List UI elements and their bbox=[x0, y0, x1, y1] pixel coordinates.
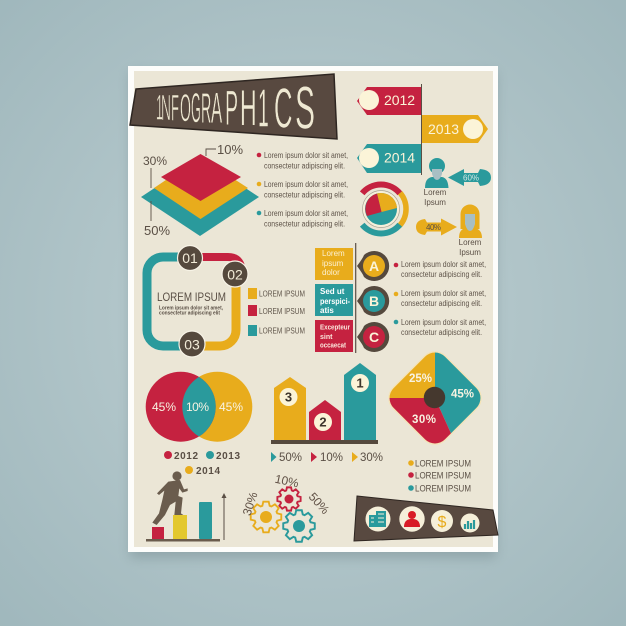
stacked layers chart bbox=[141, 142, 259, 238]
option B box: perspici- bbox=[320, 297, 350, 306]
gears: 30% bbox=[240, 490, 261, 517]
ABC options bbox=[315, 243, 389, 353]
timeline ribbons: 2013 bbox=[428, 121, 459, 137]
diamond pie chart: 30% bbox=[412, 414, 436, 426]
title text: C bbox=[274, 77, 293, 140]
option A box: Lorem bbox=[322, 249, 345, 258]
venn diagram bbox=[146, 372, 252, 442]
option C box: occaecat bbox=[320, 342, 347, 350]
title banner bbox=[130, 74, 337, 142]
diamond legend: LOREM IPSUM bbox=[415, 484, 471, 494]
option descriptions: Lorem ipsum dolor sit amet, bbox=[401, 318, 486, 327]
bar label 3: 3 bbox=[285, 390, 292, 404]
icon: bar chart bbox=[460, 514, 480, 532]
title text: A bbox=[211, 85, 223, 134]
icon: building bbox=[366, 506, 390, 532]
venn legend: 2012 bbox=[174, 451, 198, 462]
icon: climbing man bbox=[152, 471, 188, 525]
option descriptions bbox=[394, 260, 486, 337]
stacked layers chart: 30% bbox=[143, 154, 167, 168]
venn legend: 2013 bbox=[216, 451, 240, 462]
process loop bbox=[147, 246, 248, 357]
venn diagram: 45% bbox=[152, 400, 176, 414]
venn diagram: 10% bbox=[186, 400, 209, 414]
option descriptions: consectetur adipiscing elit. bbox=[401, 328, 482, 337]
layer descriptions: Lorem ipsum dolor sit amet, bbox=[264, 209, 348, 218]
person icon teal with arrow bbox=[424, 158, 491, 207]
option A box: ipsum bbox=[322, 259, 344, 268]
venn diagram: 45% bbox=[219, 400, 243, 414]
title text bbox=[156, 75, 315, 142]
timeline ribbons bbox=[357, 84, 488, 175]
diamond pie chart: 45% bbox=[451, 388, 474, 400]
gear red bbox=[277, 487, 301, 511]
bar label 2: 2 bbox=[319, 414, 327, 430]
person icon yellow with arrow: Ipsum bbox=[459, 248, 481, 257]
option B box bbox=[315, 284, 353, 316]
layer descriptions: Lorem ipsum dolor sit amet, bbox=[264, 180, 348, 189]
gears: 50% bbox=[306, 490, 332, 517]
option descriptions: Lorem ipsum dolor sit amet, bbox=[401, 260, 486, 269]
stacked layers chart: 10% bbox=[217, 142, 243, 157]
person icon teal with arrow: 60% bbox=[463, 174, 479, 182]
title text: 1 bbox=[258, 77, 269, 138]
diamond legend: LOREM IPSUM bbox=[415, 458, 471, 470]
bar chart legend: 30% bbox=[360, 452, 383, 464]
option A box: dolor bbox=[322, 268, 340, 277]
gear teal bbox=[283, 510, 315, 542]
layer descriptions: consectetur adipiscing elit. bbox=[264, 220, 345, 228]
title text: F bbox=[171, 87, 179, 129]
title text: S bbox=[295, 75, 315, 142]
option descriptions: Lorem ipsum dolor sit amet, bbox=[401, 289, 486, 298]
option C box: sint bbox=[320, 334, 333, 341]
gears bbox=[240, 472, 332, 542]
timeline ribbons: 2014 bbox=[384, 150, 415, 166]
venn legend: 2014 bbox=[196, 466, 220, 477]
process loop: Lorem ipsum dolor sit amet, bbox=[159, 306, 224, 312]
option descriptions: consectetur adipiscing elit. bbox=[401, 299, 482, 308]
layer descriptions: consectetur adipiscing elit. bbox=[264, 162, 345, 170]
title text: R bbox=[201, 84, 211, 132]
diamond legend bbox=[408, 458, 471, 494]
bar label 1: 1 bbox=[356, 376, 364, 390]
process loop: LOREM IPSUM bbox=[157, 290, 226, 304]
step 01: 01 bbox=[182, 250, 198, 266]
loop legend bbox=[248, 288, 305, 336]
icon: person bbox=[399, 506, 425, 532]
step 02: 02 bbox=[227, 266, 243, 282]
icon banner bbox=[354, 496, 498, 541]
marker C: C bbox=[369, 329, 379, 345]
title text: P bbox=[225, 80, 238, 135]
icon: dollar: $ bbox=[438, 514, 447, 531]
gears: 10% bbox=[274, 472, 300, 490]
bar chart legend: 50% bbox=[279, 452, 302, 464]
option B box: Sed ut bbox=[320, 287, 345, 296]
diamond pie chart bbox=[388, 351, 482, 445]
runner bar chart bbox=[146, 471, 226, 542]
poster sheet bbox=[128, 66, 498, 552]
gear yellow bbox=[251, 502, 281, 532]
bar chart legend bbox=[271, 452, 383, 464]
venn legend bbox=[164, 451, 240, 477]
person icon teal with arrow: Lorem bbox=[424, 188, 447, 197]
loop legend: LOREM IPSUM bbox=[259, 306, 305, 316]
title text: H bbox=[240, 80, 257, 137]
process loop: consectetur adipiscing elit bbox=[159, 310, 220, 316]
person icon yellow with arrow: Lorem bbox=[459, 238, 482, 247]
loop legend: LOREM IPSUM bbox=[259, 288, 305, 298]
layer descriptions: Lorem ipsum dolor sit amet, bbox=[264, 151, 348, 160]
person icon teal with arrow: Ipsum bbox=[424, 198, 446, 207]
donut chart bbox=[362, 185, 406, 233]
bar chart legend: 10% bbox=[320, 452, 343, 464]
loop legend: LOREM IPSUM bbox=[259, 326, 305, 336]
option A box bbox=[315, 248, 353, 280]
arrow bar chart bbox=[271, 363, 378, 444]
diamond pie chart: 25% bbox=[409, 373, 432, 385]
layer descriptions bbox=[257, 151, 348, 228]
person icon yellow with arrow: 40% bbox=[426, 223, 441, 232]
marker B: B bbox=[369, 293, 379, 309]
option C box bbox=[315, 320, 353, 352]
diamond legend: LOREM IPSUM bbox=[415, 470, 471, 482]
title text: N bbox=[161, 87, 171, 128]
title text: G bbox=[191, 84, 201, 131]
title text: O bbox=[180, 86, 191, 130]
step 03: 03 bbox=[184, 336, 200, 352]
marker A: A bbox=[369, 258, 379, 274]
timeline ribbons: 2012 bbox=[384, 92, 415, 108]
layer descriptions: consectetur adipiscing elit. bbox=[264, 190, 345, 200]
option descriptions: consectetur adipiscing elit. bbox=[401, 270, 482, 279]
person icon yellow with arrow bbox=[416, 204, 482, 257]
option C box: Excepteur bbox=[320, 324, 350, 332]
stacked layers chart: 50% bbox=[144, 223, 170, 238]
title text: 1 bbox=[156, 88, 163, 127]
icon: dollar bbox=[431, 510, 453, 532]
option B box: atis bbox=[320, 306, 334, 315]
